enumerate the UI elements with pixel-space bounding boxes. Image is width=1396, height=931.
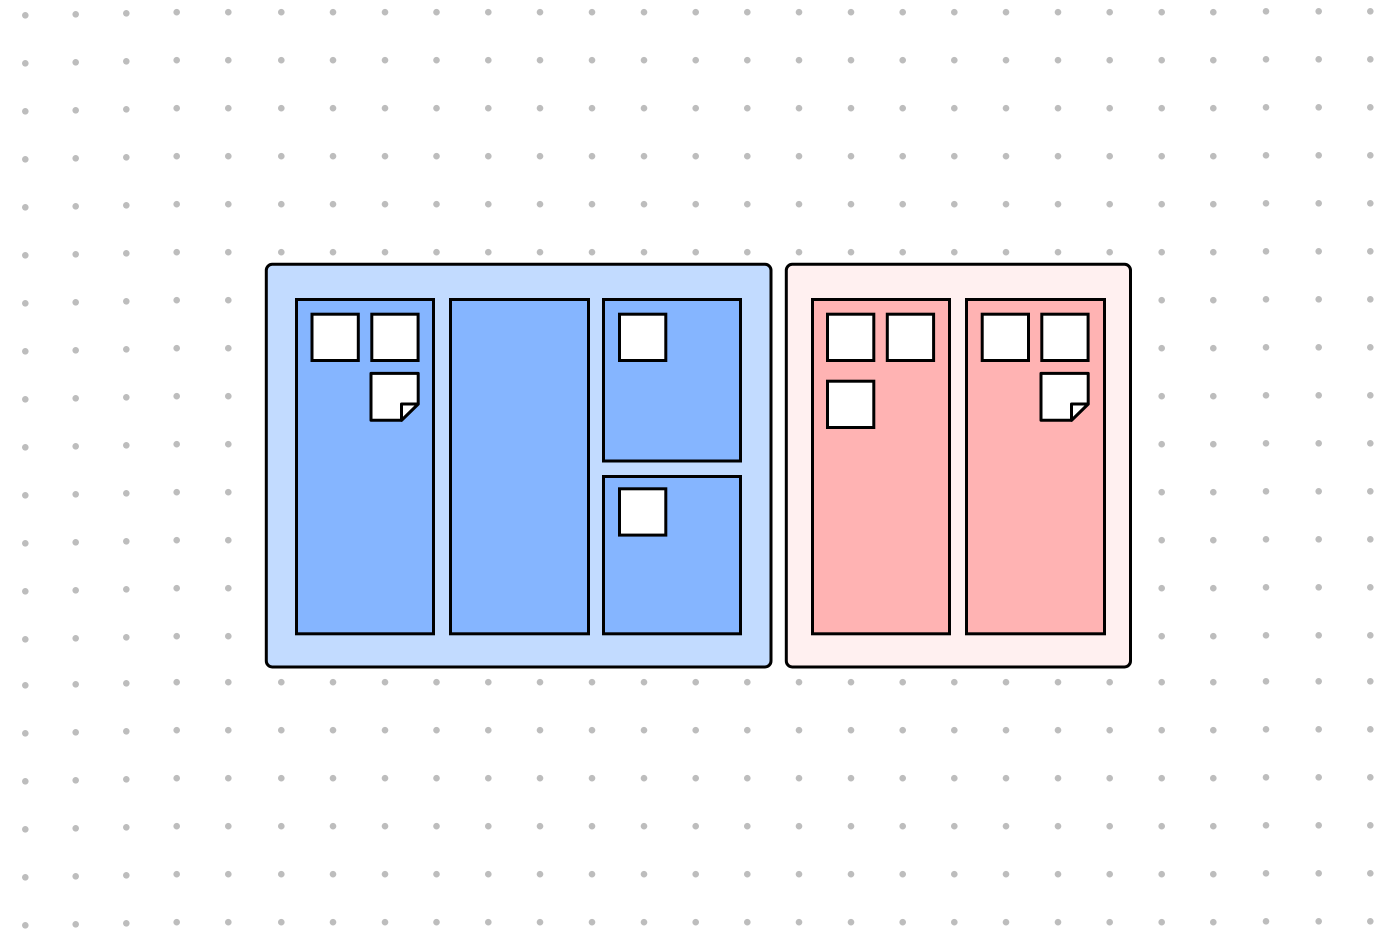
card: blue upper cell [620,314,666,360]
pink column 1 [812,300,950,634]
blue column 1 [296,300,434,634]
card: pink column 1, first [828,314,874,360]
card: blue column 1, second [372,314,418,360]
panel: blue board [266,264,771,667]
panel: pink board [786,264,1130,667]
blue column 3, lower cell [604,476,740,634]
card: pink column 2, first [982,314,1028,360]
card: blue column 1, first [312,314,358,360]
card: pink column 2, second [1042,314,1088,360]
blue column 3, upper cell [604,300,740,461]
card: blue lower cell [620,489,666,535]
icon: sticky note with folded corner, blue column [371,373,418,420]
icon: sticky note with folded corner, pink column [1041,373,1088,420]
pink column 2 [966,300,1104,634]
card: pink column 1, second [887,314,934,360]
blue column 2 [450,300,588,634]
card: pink column 1, third [828,381,874,428]
